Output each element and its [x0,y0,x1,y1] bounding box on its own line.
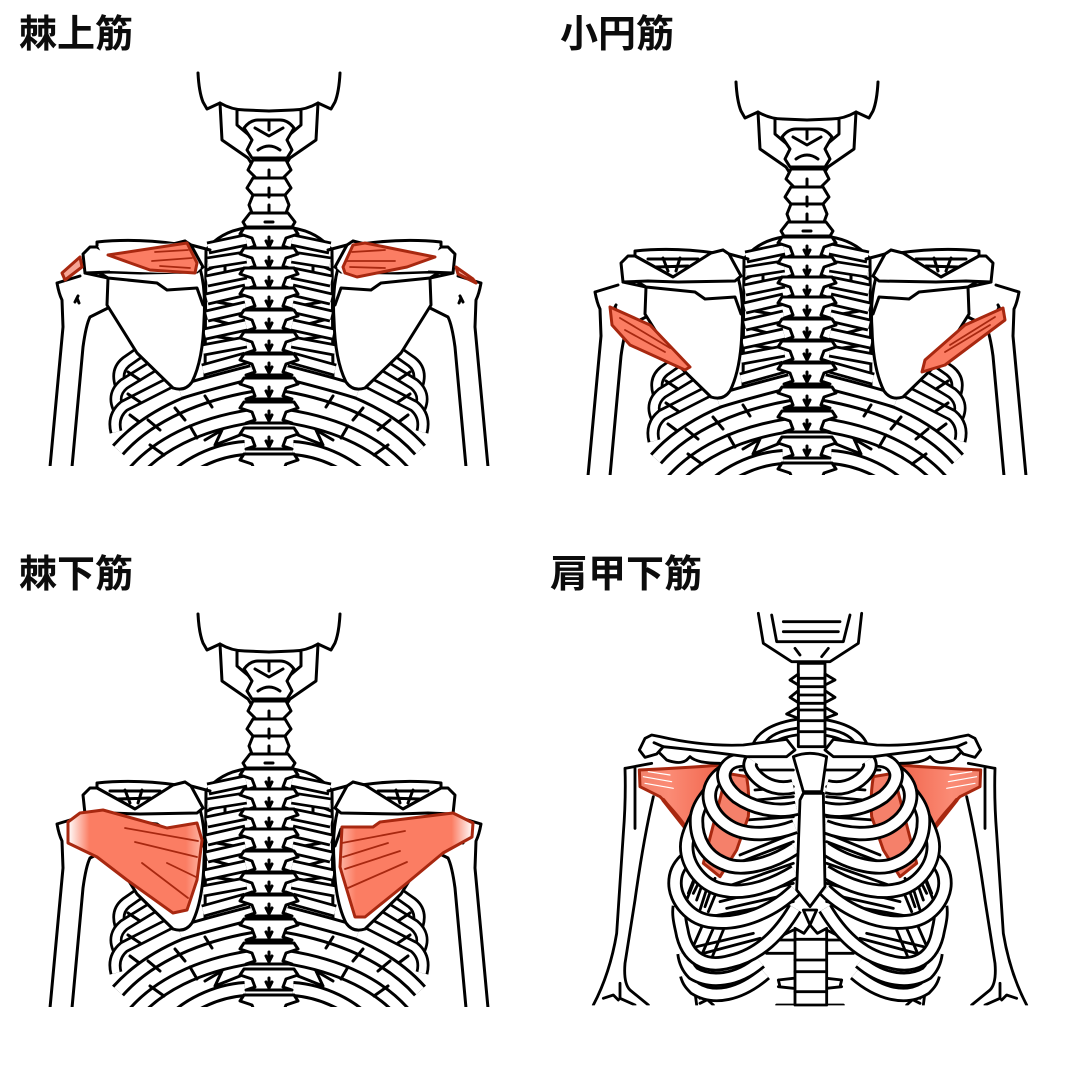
title: 小円筋: 小円筋 [560,14,674,56]
muscle: left supraspinatus [62,243,197,280]
muscle: left teres minor [610,307,690,370]
title: 棘上筋: 棘上筋 [19,14,133,56]
panel: supraspinatus skeleton with highlighted muscle [50,73,488,485]
cervical spine [787,663,837,747]
title: 棘下筋: 棘下筋 [19,554,133,596]
white underlay: left and right scapular spine [98,243,440,274]
panel: teres minor skeleton with highlighted muscle [588,82,1026,494]
panel: infraspinatus skeleton with highlighted muscle [50,614,488,1026]
muscle: right supraspinatus [343,243,476,283]
muscle: right teres minor [922,308,1005,372]
panel: subscapularis front skeleton with highlighted muscle [593,613,1027,1005]
title: 肩甲下筋: 肩甲下筋 [550,554,702,596]
muscle: right infraspinatus [340,813,473,917]
central spine [795,925,827,1005]
sternum [793,753,827,925]
front skeleton: arms, ribs and subscapularis [593,719,1027,1005]
muscle: left infraspinatus [68,810,202,913]
mandible and hyoid [758,613,862,662]
